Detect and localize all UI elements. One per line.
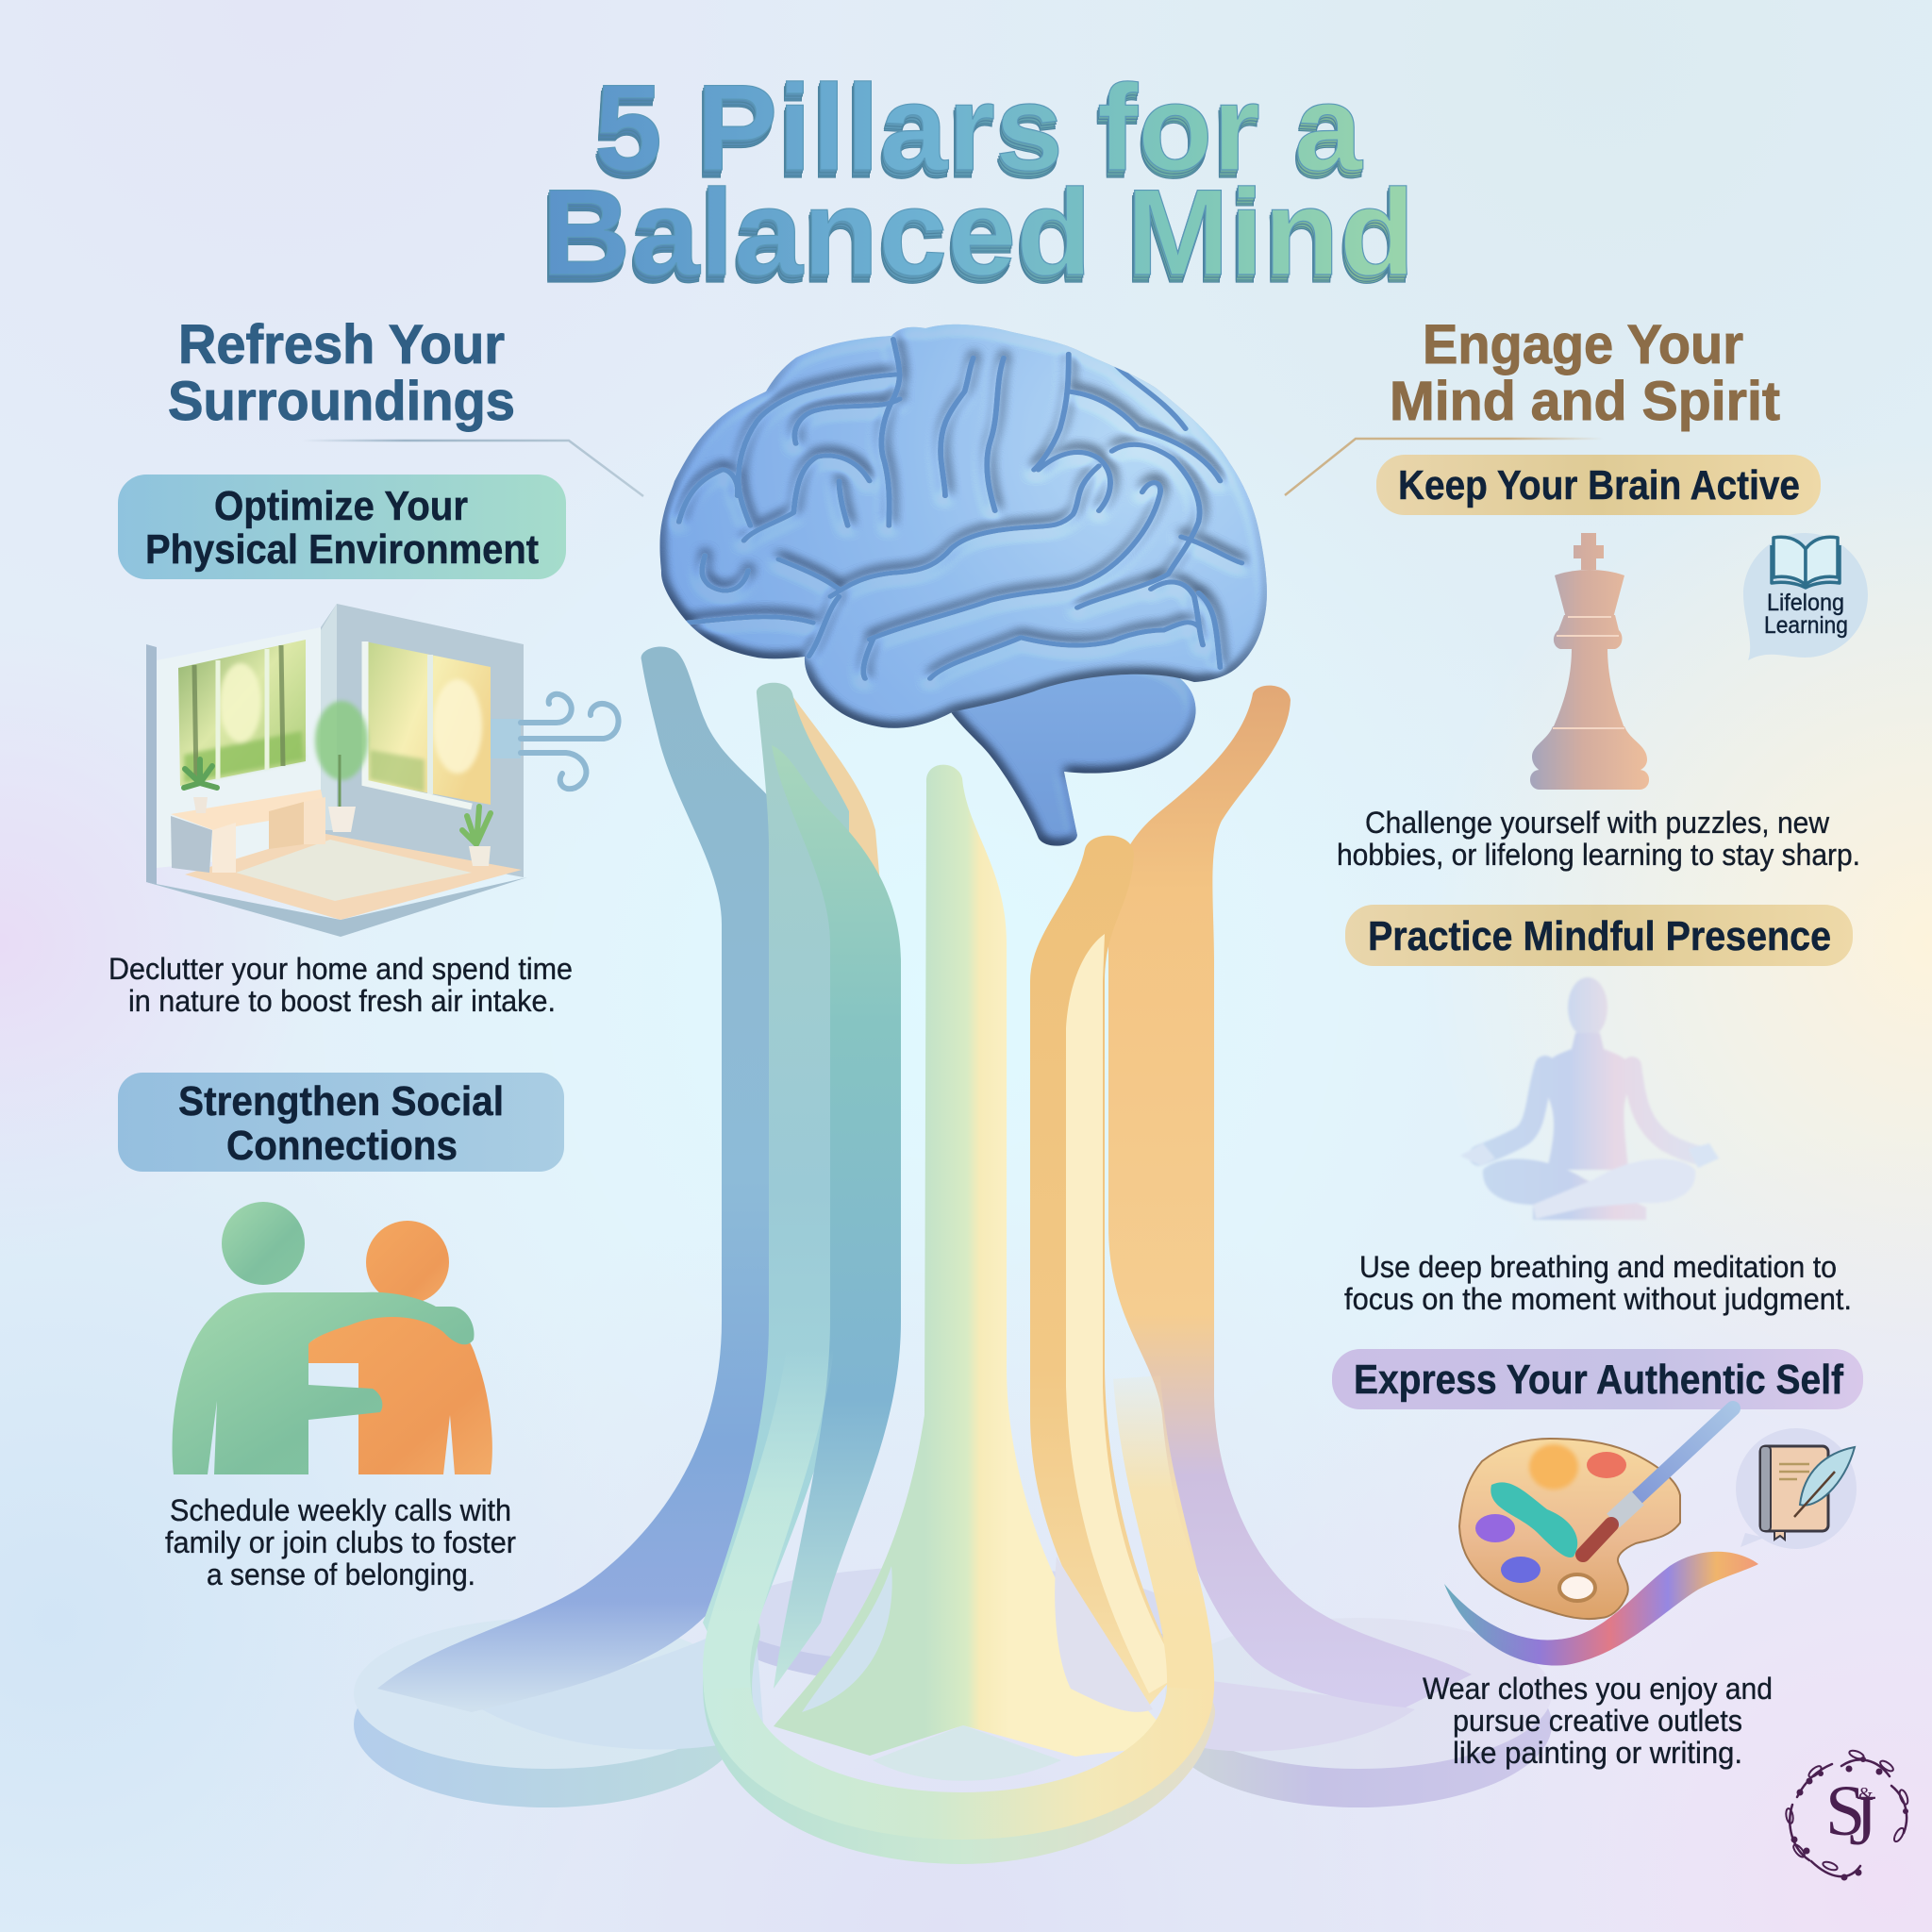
cerebellum and stem	[943, 658, 1196, 846]
logo: S and J floral wreath	[1785, 1749, 1909, 1881]
pill: practice mindful presence: Practice Mindful Presence	[1368, 913, 1831, 959]
text: use deep breathing: focus on the moment without judgment.	[1344, 1282, 1852, 1316]
pill: express your authentic self	[1332, 1349, 1863, 1409]
wind swirls	[491, 694, 619, 789]
palette board	[1459, 1439, 1680, 1619]
right window	[365, 641, 491, 807]
pill: strengthen social connections: Connections	[226, 1123, 458, 1169]
icon: two people embracing	[173, 1202, 492, 1474]
icon: meditating figure	[1460, 977, 1719, 1220]
plants	[184, 701, 491, 866]
panel: engage your mind and spirit	[1332, 314, 1868, 1770]
pill: keep your brain active	[1376, 455, 1821, 515]
leader line: right	[1285, 439, 1604, 495]
cream stripe on orange pillar	[1066, 934, 1181, 1693]
text: use deep breathing: Use deep breathing and meditation to	[1359, 1250, 1837, 1284]
text: wear clothes: like painting or writing.	[1453, 1736, 1742, 1770]
title: 5 Pillars for a	[594, 58, 1364, 196]
text: schedule weekly calls: Schedule weekly calls with	[170, 1493, 511, 1527]
icon: lifelong learning bubble	[1743, 533, 1868, 660]
pill: express your authentic self: Express Your Authentic Self	[1354, 1357, 1843, 1403]
brain	[660, 325, 1267, 846]
cerebrum fold shadow base	[660, 325, 1267, 728]
text: declutter your home	[108, 952, 573, 1018]
text: wear clothes	[1423, 1672, 1773, 1770]
title	[541, 58, 1415, 301]
text: schedule weekly calls	[165, 1493, 516, 1591]
paint blobs	[1529, 1444, 1578, 1490]
pill: optimize your physical environment: Physical Environment	[145, 526, 539, 573]
text: challenge yourself: hobbies, or lifelong learning to stay sharp.	[1337, 838, 1860, 872]
ring: right rise	[1137, 1377, 1191, 1690]
book glyph	[1772, 537, 1840, 588]
icon: lifelong learning bubble: Learning	[1764, 612, 1848, 639]
text: wear clothes: pursue creative outlets	[1453, 1704, 1742, 1738]
pillar: blue left flare	[377, 646, 811, 1712]
logo: S and J floral wreath: S	[1825, 1772, 1865, 1851]
logo: S and J floral wreath: J	[1849, 1781, 1877, 1860]
pillar: center cream	[774, 765, 1170, 1757]
icon: paint palette and brush	[1444, 1408, 1758, 1666]
text: challenge yourself: Challenge yourself with puzzles, new	[1365, 806, 1830, 840]
brush	[1624, 1408, 1733, 1509]
heading: engage your mind and spirit: Mind and Spirit	[1390, 371, 1780, 432]
heading: engage your mind and spirit	[1390, 314, 1780, 432]
icon: journal and quill bubble	[1736, 1428, 1857, 1549]
pale strip on right flare	[1184, 1019, 1208, 1358]
heading: refresh your surroundings	[168, 314, 515, 432]
cerebrum embossed folds	[660, 325, 1267, 728]
heading: engage your mind and spirit: Engage Your	[1423, 314, 1743, 375]
colour swoosh	[1444, 1552, 1758, 1666]
pillar: orange inner	[1030, 836, 1179, 1712]
icon: room with forest windows	[146, 604, 619, 937]
panel: refresh your surroundings	[108, 314, 619, 1591]
pill: keep your brain active: Keep Your Brain Active	[1398, 462, 1800, 508]
desk	[171, 790, 325, 873]
text: declutter your home: Declutter your home and spend time	[108, 952, 573, 986]
text: schedule weekly calls: family or join clubs to foster	[165, 1525, 516, 1559]
pillar: pale teal	[703, 683, 849, 1689]
ring front	[727, 1689, 1191, 1816]
pill: strengthen social connections: Strengthen Social	[178, 1078, 504, 1124]
text: wear clothes: Wear clothes you enjoy and	[1423, 1672, 1773, 1706]
ring: left rise	[726, 1340, 811, 1690]
pill: strengthen social connections	[118, 1073, 564, 1172]
title: Balanced Mind	[541, 163, 1415, 301]
base platform	[354, 1566, 1552, 1807]
logo: S and J floral wreath: &	[1858, 1784, 1874, 1805]
pillar: green-teal	[772, 745, 901, 1689]
central pillars and base sculpture	[354, 646, 1552, 1840]
heading: refresh your surroundings: Refresh Your	[178, 314, 505, 375]
text: declutter your home: in nature to boost fresh air intake.	[128, 984, 556, 1018]
pillar: lavender-orange right flare	[1108, 686, 1472, 1707]
icon: lifelong learning bubble: Lifelong	[1767, 590, 1844, 616]
left window	[178, 640, 306, 786]
leader line: left	[302, 441, 643, 496]
text: use deep breathing	[1344, 1250, 1852, 1316]
text: challenge yourself	[1337, 806, 1860, 872]
pill: optimize your physical environment	[118, 475, 566, 579]
finger: orange behind green	[791, 693, 882, 906]
text: schedule weekly calls: a sense of belonging.	[207, 1557, 475, 1591]
ring side	[727, 1632, 1191, 1840]
floor	[146, 877, 527, 937]
heading: refresh your surroundings: Surroundings	[168, 371, 515, 432]
base openings	[802, 1557, 1153, 1781]
pill: optimize your physical environment: Optimize Your	[214, 483, 468, 529]
icon: chess king	[1530, 533, 1649, 790]
thumb hole	[1559, 1574, 1595, 1601]
pill: practice mindful presence	[1345, 905, 1853, 966]
